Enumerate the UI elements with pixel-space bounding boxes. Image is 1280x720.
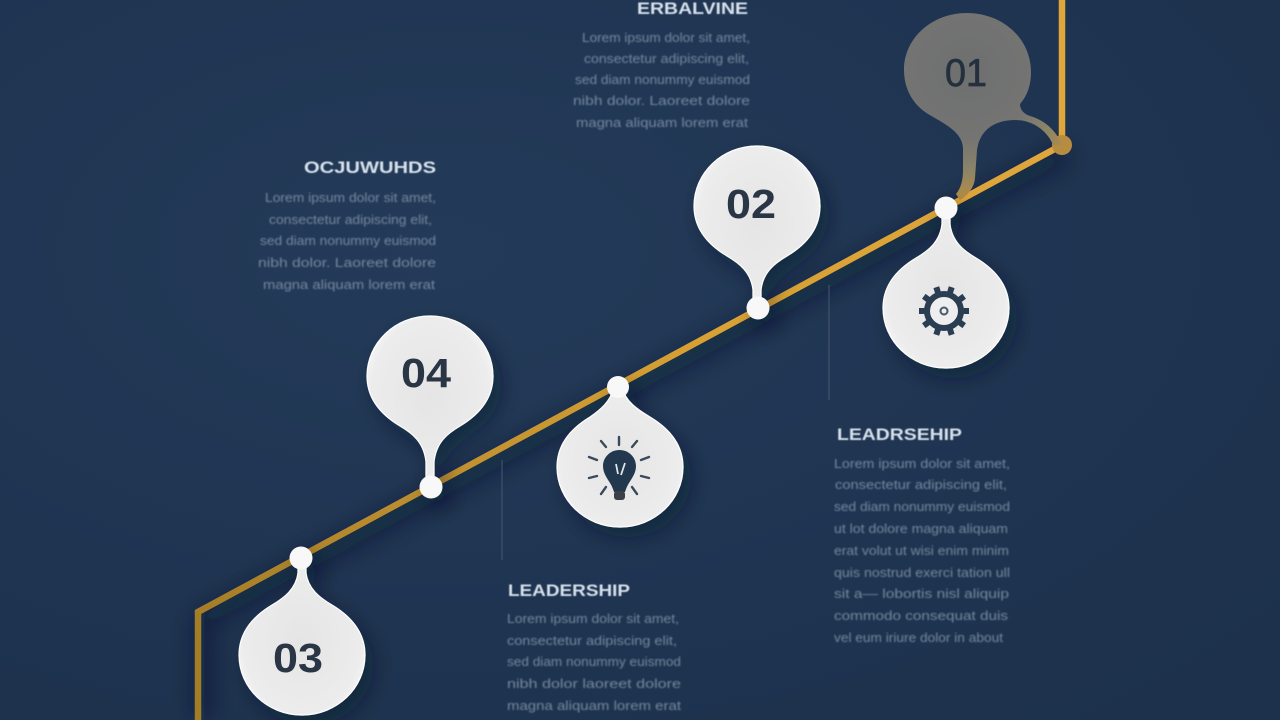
text block: top center — [573, 0, 750, 130]
pin 03 body — [239, 558, 365, 715]
body copy: upper left: magna aliquam lorem erat — [263, 277, 435, 292]
pin 02 — [694, 146, 820, 320]
gold stepped timeline line — [198, 0, 1067, 720]
body copy: leadership lower: magna aliquam lorem erat — [507, 698, 681, 713]
pin 02 number: 02 — [726, 181, 776, 227]
text block: upper left — [258, 158, 436, 292]
pin 03 number: 03 — [273, 635, 323, 681]
text block: leadership right — [834, 425, 1010, 645]
pin 04 body — [367, 316, 493, 487]
gear pin node — [934, 196, 958, 220]
body copy: leadership lower: nibh dolor laoreet dolore — [507, 676, 681, 691]
pin 01: grey marker — [904, 13, 1072, 200]
body copy: leadership lower: consectetur adipiscing elit, — [507, 633, 677, 648]
body copy: top center: magna aliquam lorem erat — [576, 115, 748, 130]
body copy: top center: consectetur adipiscing elit, — [584, 51, 749, 66]
body copy: leadership right — [834, 456, 1010, 645]
lightbulb pin node — [607, 376, 629, 398]
body copy: top center: sed diam nonummy euismod — [575, 72, 750, 87]
thin vertical divider right — [828, 285, 830, 400]
heading: upper left: OCJUWUHDS — [304, 158, 436, 177]
pin 04 node — [420, 476, 442, 498]
body copy: leadership right: consectetur adipiscing elit, — [835, 477, 1007, 492]
icon: lightbulb — [589, 437, 649, 500]
pin 04 — [367, 316, 493, 498]
heading: leadership right: LEADRSEHIP — [837, 425, 962, 444]
gear pin body — [883, 208, 1009, 368]
body copy: upper left: Lorem ipsum dolor sit amet, — [265, 190, 436, 205]
body copy: leadership right: ut lot dolore magna aliquam — [834, 521, 1008, 536]
pin 03 — [239, 546, 365, 715]
pin 02 node — [746, 296, 770, 320]
body copy: upper left: sed diam nonummy euismod — [260, 233, 436, 248]
pin 01 body with arm and stem — [904, 13, 1062, 200]
icon: gear — [919, 287, 969, 335]
pin 01 number: 01 — [945, 52, 987, 95]
pin: lightbulb — [557, 376, 683, 527]
body copy: leadership right: vel eum iriure dolor in about — [834, 630, 1003, 645]
body copy: upper left — [258, 190, 436, 292]
lightbulb pin body — [557, 389, 683, 527]
body copy: upper left: consectetur adipiscing elit, — [269, 212, 432, 227]
pin 04 number: 04 — [401, 350, 451, 396]
thin vertical divider left — [502, 460, 503, 560]
pin 01 corner node — [1052, 135, 1072, 155]
body copy: leadership right: quis nostrud exerci tation ull — [834, 565, 1010, 580]
body copy: leadership right: sit a— lobortis nisl aliquip — [834, 586, 1009, 601]
body copy: top center — [573, 30, 750, 130]
body copy: leadership right: erat volut ut wisi enim minim — [834, 543, 1009, 558]
body copy: leadership right: commodo consequat duis — [834, 608, 1009, 623]
body copy: leadership lower: Lorem ipsum dolor sit amet, — [507, 611, 679, 626]
text block: leadership lower — [507, 581, 681, 713]
body copy: leadership lower: sed diam nonummy euismod — [507, 654, 681, 669]
body copy: top center: nibh dolor. Laoreet dolore — [573, 93, 750, 108]
heading: leadership lower: LEADERSHIP — [508, 581, 630, 600]
body copy: leadership right: sed diam nonummy euismod — [834, 499, 1010, 514]
body copy: upper left: nibh dolor. Laoreet dolore — [258, 255, 436, 270]
body copy: top center: Lorem ipsum dolor sit amet, — [582, 30, 750, 45]
body copy: leadership lower — [507, 611, 681, 713]
body copy: leadership right: Lorem ipsum dolor sit amet, — [834, 456, 1010, 471]
pin 03 node — [290, 546, 312, 570]
pin 02 body — [694, 146, 820, 308]
pin: gear — [883, 196, 1009, 368]
